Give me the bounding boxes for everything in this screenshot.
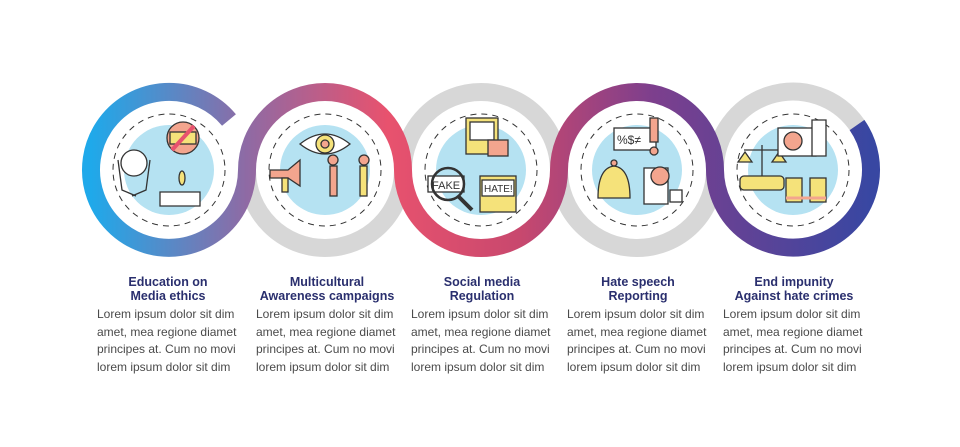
column 3 bbox=[411, 275, 550, 374]
column 2: Lorem ipsum dolor sit dim bbox=[256, 307, 393, 321]
column 1: Education on bbox=[128, 275, 208, 289]
column 2: principes at. Cum no movi bbox=[256, 342, 395, 356]
column 2: Multicultural bbox=[290, 275, 364, 289]
colored snake path bbox=[91, 92, 871, 248]
column 5: Lorem ipsum dolor sit dim bbox=[723, 307, 860, 321]
column 2 bbox=[256, 275, 396, 374]
column 2: Awareness campaigns bbox=[260, 288, 394, 302]
column 5: Against hate crimes bbox=[735, 288, 853, 302]
column 4 bbox=[567, 275, 706, 374]
icon: social media bbox=[428, 118, 516, 212]
column 4: Lorem ipsum dolor sit dim bbox=[567, 307, 704, 321]
column 4: principes at. Cum no movi bbox=[567, 342, 706, 356]
icon: reporting bbox=[598, 118, 682, 204]
column 1: principes at. Cum no movi bbox=[97, 342, 236, 356]
column 2: amet, mea regione diamet bbox=[256, 324, 395, 338]
column 1: amet, mea regione diamet bbox=[97, 324, 236, 338]
column 1 bbox=[97, 275, 236, 374]
grey track bbox=[247, 92, 857, 248]
icon circles bbox=[113, 114, 849, 226]
column 3: Social media bbox=[444, 275, 520, 289]
icon: social media: FAKE bbox=[432, 180, 460, 192]
column 4: Reporting bbox=[608, 288, 668, 302]
icon: social media: HATE! bbox=[484, 184, 513, 195]
icon: education bbox=[118, 122, 200, 206]
icon: end impunity bbox=[738, 120, 826, 202]
column 5: End impunity bbox=[754, 275, 834, 289]
column 5 bbox=[723, 275, 862, 374]
column 2: lorem ipsum dolor sit dim bbox=[256, 360, 389, 374]
column 3: Regulation bbox=[450, 288, 514, 302]
column 5: amet, mea regione diamet bbox=[723, 324, 862, 338]
icon: awareness bbox=[270, 134, 369, 196]
column 4: Hate speech bbox=[601, 275, 675, 289]
column 3: lorem ipsum dolor sit dim bbox=[411, 360, 544, 374]
column 3: amet, mea regione diamet bbox=[411, 324, 550, 338]
column 5: principes at. Cum no movi bbox=[723, 342, 862, 356]
column 3: Lorem ipsum dolor sit dim bbox=[411, 307, 548, 321]
column 5: lorem ipsum dolor sit dim bbox=[723, 360, 856, 374]
column 4: amet, mea regione diamet bbox=[567, 324, 706, 338]
column 4: lorem ipsum dolor sit dim bbox=[567, 360, 700, 374]
icon: reporting: %$≠ bbox=[617, 133, 641, 147]
column 1: Lorem ipsum dolor sit dim bbox=[97, 307, 234, 321]
column 3: principes at. Cum no movi bbox=[411, 342, 550, 356]
column 1: Media ethics bbox=[130, 288, 206, 302]
column 1: lorem ipsum dolor sit dim bbox=[97, 360, 230, 374]
